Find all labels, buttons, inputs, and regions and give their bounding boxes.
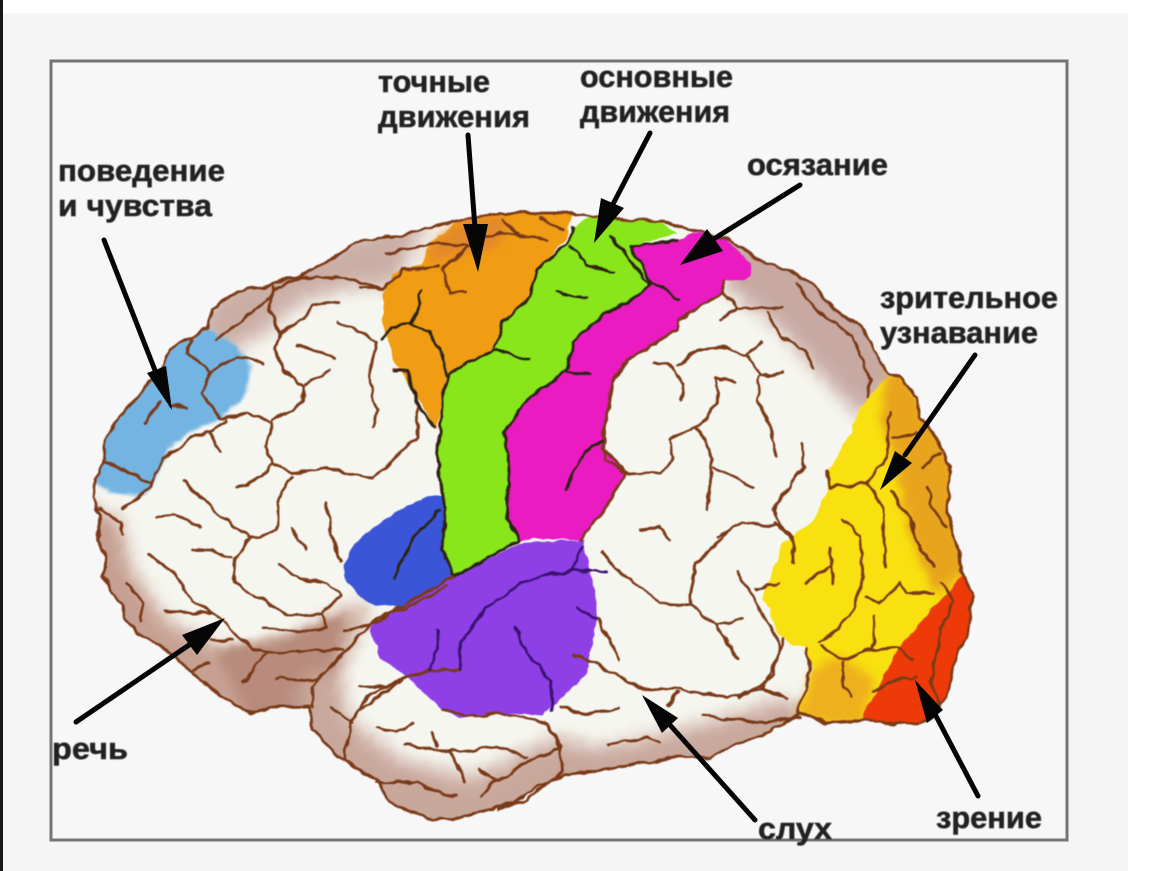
label: vision: зрение bbox=[936, 800, 1042, 835]
arrow: behaviour and feelings bbox=[104, 240, 172, 410]
arrow: vision bbox=[915, 680, 978, 796]
region: precise movements (orange) bbox=[383, 213, 573, 430]
label: basic movements: движения bbox=[580, 94, 730, 129]
arrow: touch bbox=[680, 185, 800, 265]
label: visual recognition: зрительное bbox=[880, 280, 1058, 315]
cortical folds: occipital lobe bbox=[740, 413, 953, 717]
cortical folds: central regions bbox=[345, 217, 723, 630]
label: behaviour and feelings: поведение bbox=[58, 153, 225, 188]
region: touch (magenta) bbox=[503, 232, 750, 540]
label: behaviour and feelings: и чувства bbox=[58, 188, 213, 223]
region: hearing (purple) bbox=[370, 540, 598, 718]
label: visual recognition: узнавание bbox=[880, 315, 1038, 350]
label: hearing: слух bbox=[758, 811, 833, 846]
label: touch: осязание bbox=[747, 147, 888, 182]
brain outline bbox=[93, 213, 973, 820]
region: visual recognition (yellow) bbox=[763, 377, 962, 723]
label: precise movements: точные bbox=[378, 64, 490, 99]
label: precise movements: движения bbox=[378, 99, 530, 134]
label: speech: речь bbox=[52, 731, 128, 766]
brain illustration bbox=[70, 200, 990, 840]
region: basic movements (green) bbox=[438, 217, 677, 577]
cortical folds: temporal lobe bbox=[330, 533, 800, 810]
arrow: speech bbox=[76, 618, 225, 722]
arrow: visual recognition bbox=[880, 355, 975, 490]
arrow: basic movements bbox=[594, 133, 650, 243]
cortical folds: frontal lobe bbox=[100, 277, 447, 707]
region: vision (red) bbox=[860, 575, 978, 730]
region: speech area (dark blue) bbox=[343, 495, 453, 607]
arrow: hearing bbox=[642, 695, 755, 820]
arrow: precise movements bbox=[463, 135, 488, 272]
yellow region orange tint bbox=[880, 370, 970, 595]
brain base with tinted rim bbox=[70, 200, 990, 840]
cortical folds: parietal lobe bbox=[603, 283, 870, 540]
region: behaviour and feelings (light blue) bbox=[93, 327, 250, 495]
figure frame bbox=[51, 61, 1067, 840]
label: basic movements: основные bbox=[580, 59, 733, 94]
orange darker top tint bbox=[425, 215, 510, 262]
